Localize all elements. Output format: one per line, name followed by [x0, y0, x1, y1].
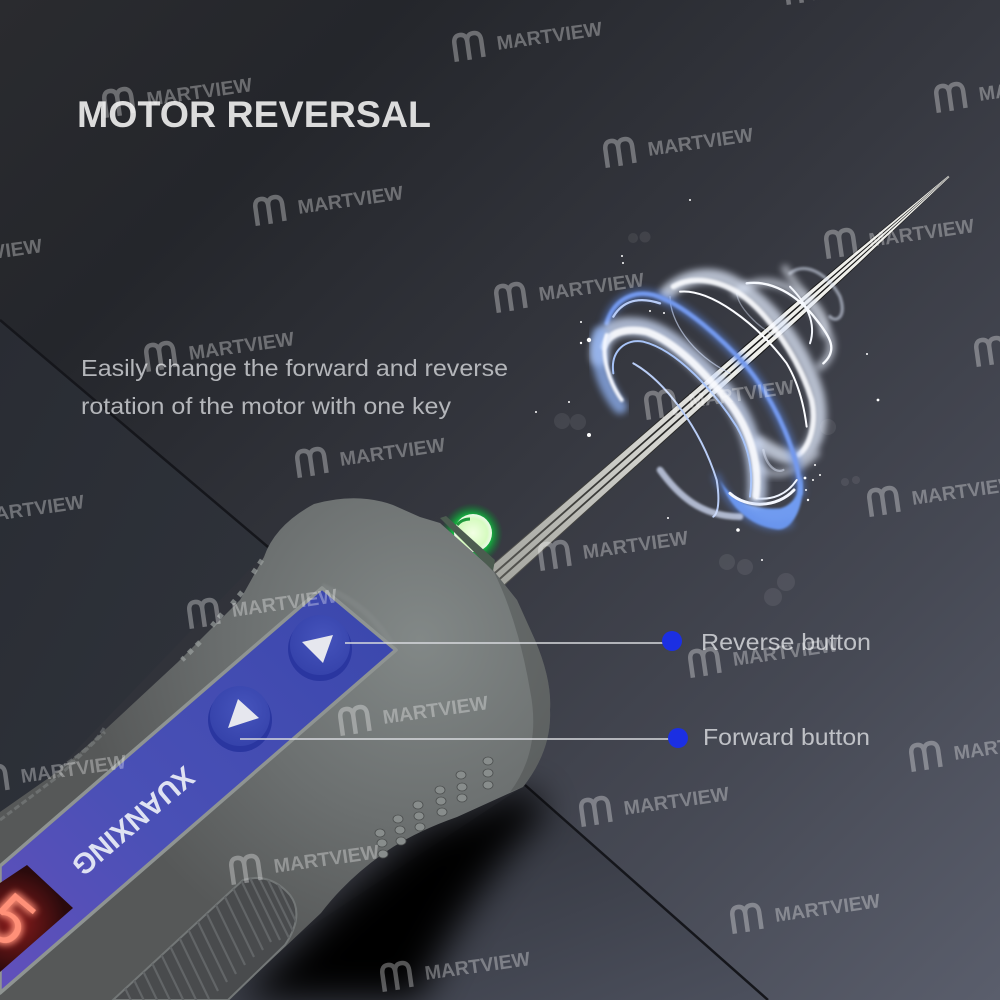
watermark [230, 838, 381, 885]
button recess [322, 586, 395, 650]
panel: lower-left dark plate [0, 320, 270, 830]
watermark [604, 121, 755, 168]
watermark: MARTVIEW [187, 328, 296, 365]
callout: forward button [240, 724, 870, 750]
reverse label: Reverse button [701, 629, 871, 655]
forward dot [668, 728, 688, 748]
LED rim shadow [457, 519, 470, 525]
watermark: MARTVIEW [646, 124, 755, 161]
watermark [339, 689, 490, 736]
left edge studs [182, 560, 262, 660]
brand text: XUANXING [65, 760, 200, 881]
left edge ribs [0, 728, 105, 820]
reverse triangle [302, 635, 333, 663]
head lip shade [493, 570, 550, 792]
forward button cap [208, 688, 272, 752]
watermark [145, 325, 296, 372]
plate edge lines [0, 320, 768, 1000]
watermark [254, 179, 405, 226]
reverse button cap [288, 617, 352, 681]
handle body [0, 498, 550, 1000]
watermark [785, 0, 936, 5]
forward leader line [240, 738, 678, 740]
LED glow [441, 503, 503, 565]
button: reverse [288, 615, 352, 681]
grip ribs [125, 878, 300, 1000]
watermark: MARTVIEW [581, 527, 690, 564]
needle body [487, 167, 957, 587]
watermark [868, 470, 1000, 517]
watermark: MARTVIEW [495, 18, 604, 55]
ring A blue outer [607, 294, 803, 529]
watermark: MARTVIEW [687, 376, 796, 413]
grip studs [375, 757, 493, 858]
energy swirl rings [598, 268, 842, 529]
watermark [645, 373, 796, 420]
watermark: MARTVIEW [338, 434, 447, 471]
handle shadow [240, 790, 545, 1000]
title: MOTOR REVERSAL [77, 94, 431, 135]
ring D small [785, 268, 842, 333]
watermark: MARTVIEW [145, 74, 254, 111]
control panel [0, 588, 396, 993]
sparkles [535, 199, 879, 561]
watermark [381, 945, 532, 992]
watermark [975, 320, 1000, 367]
ring C [737, 282, 831, 367]
display window [0, 865, 73, 972]
description text: Easily change the forward and reverse [81, 355, 508, 381]
needle rod 2 [493, 174, 951, 580]
watermark: MARTVIEW [296, 182, 405, 219]
watermark: MARTVIEW [622, 783, 731, 820]
watermark [731, 887, 882, 934]
bokeh dots [554, 232, 860, 606]
LED socket [440, 516, 495, 571]
ring B [667, 276, 819, 474]
reverse dot [662, 631, 682, 651]
watermark [188, 582, 339, 629]
watermark [453, 15, 604, 62]
watermark: MARTVIEW [19, 751, 128, 788]
watermark [296, 431, 447, 478]
watermark [103, 71, 254, 118]
watermark [580, 780, 731, 827]
green LED [441, 503, 503, 565]
grip shape [113, 878, 296, 1000]
watermark [825, 212, 976, 259]
watermark [689, 631, 840, 678]
callout: reverse button [345, 629, 871, 655]
watermark: MARTVIEW [423, 948, 532, 985]
ring A inner thin [633, 363, 783, 517]
ribbed grip [113, 878, 300, 1000]
needle rod 1 [488, 168, 949, 578]
forward label: Forward button [703, 724, 870, 750]
reverse leader line [345, 642, 672, 644]
watermark: MARTVIEW [381, 692, 490, 729]
watermark [0, 748, 128, 795]
needle rod 3 [495, 177, 956, 586]
forward triangle [228, 699, 259, 728]
tool handle [0, 498, 550, 1000]
watermark [495, 266, 646, 313]
needle [487, 167, 957, 587]
ring A white front band [600, 327, 757, 497]
panel: bottom plate [200, 785, 768, 1000]
watermark: MARTVIEW [272, 841, 381, 878]
LED bulb [454, 514, 492, 552]
watermark: MARTVIEW [230, 585, 339, 622]
watermark: MARTVIEW [731, 634, 840, 671]
watermark [935, 66, 1000, 113]
watermark: MARTVIEW [773, 890, 882, 927]
ring A left tail [598, 333, 622, 407]
watermark [910, 725, 1000, 772]
watermark: MARTVIEW [537, 269, 646, 306]
watermark [539, 524, 690, 571]
watermark: MARTVIEW [867, 215, 976, 252]
description text: rotation of the motor with one key [81, 393, 452, 419]
button: forward [208, 686, 272, 752]
